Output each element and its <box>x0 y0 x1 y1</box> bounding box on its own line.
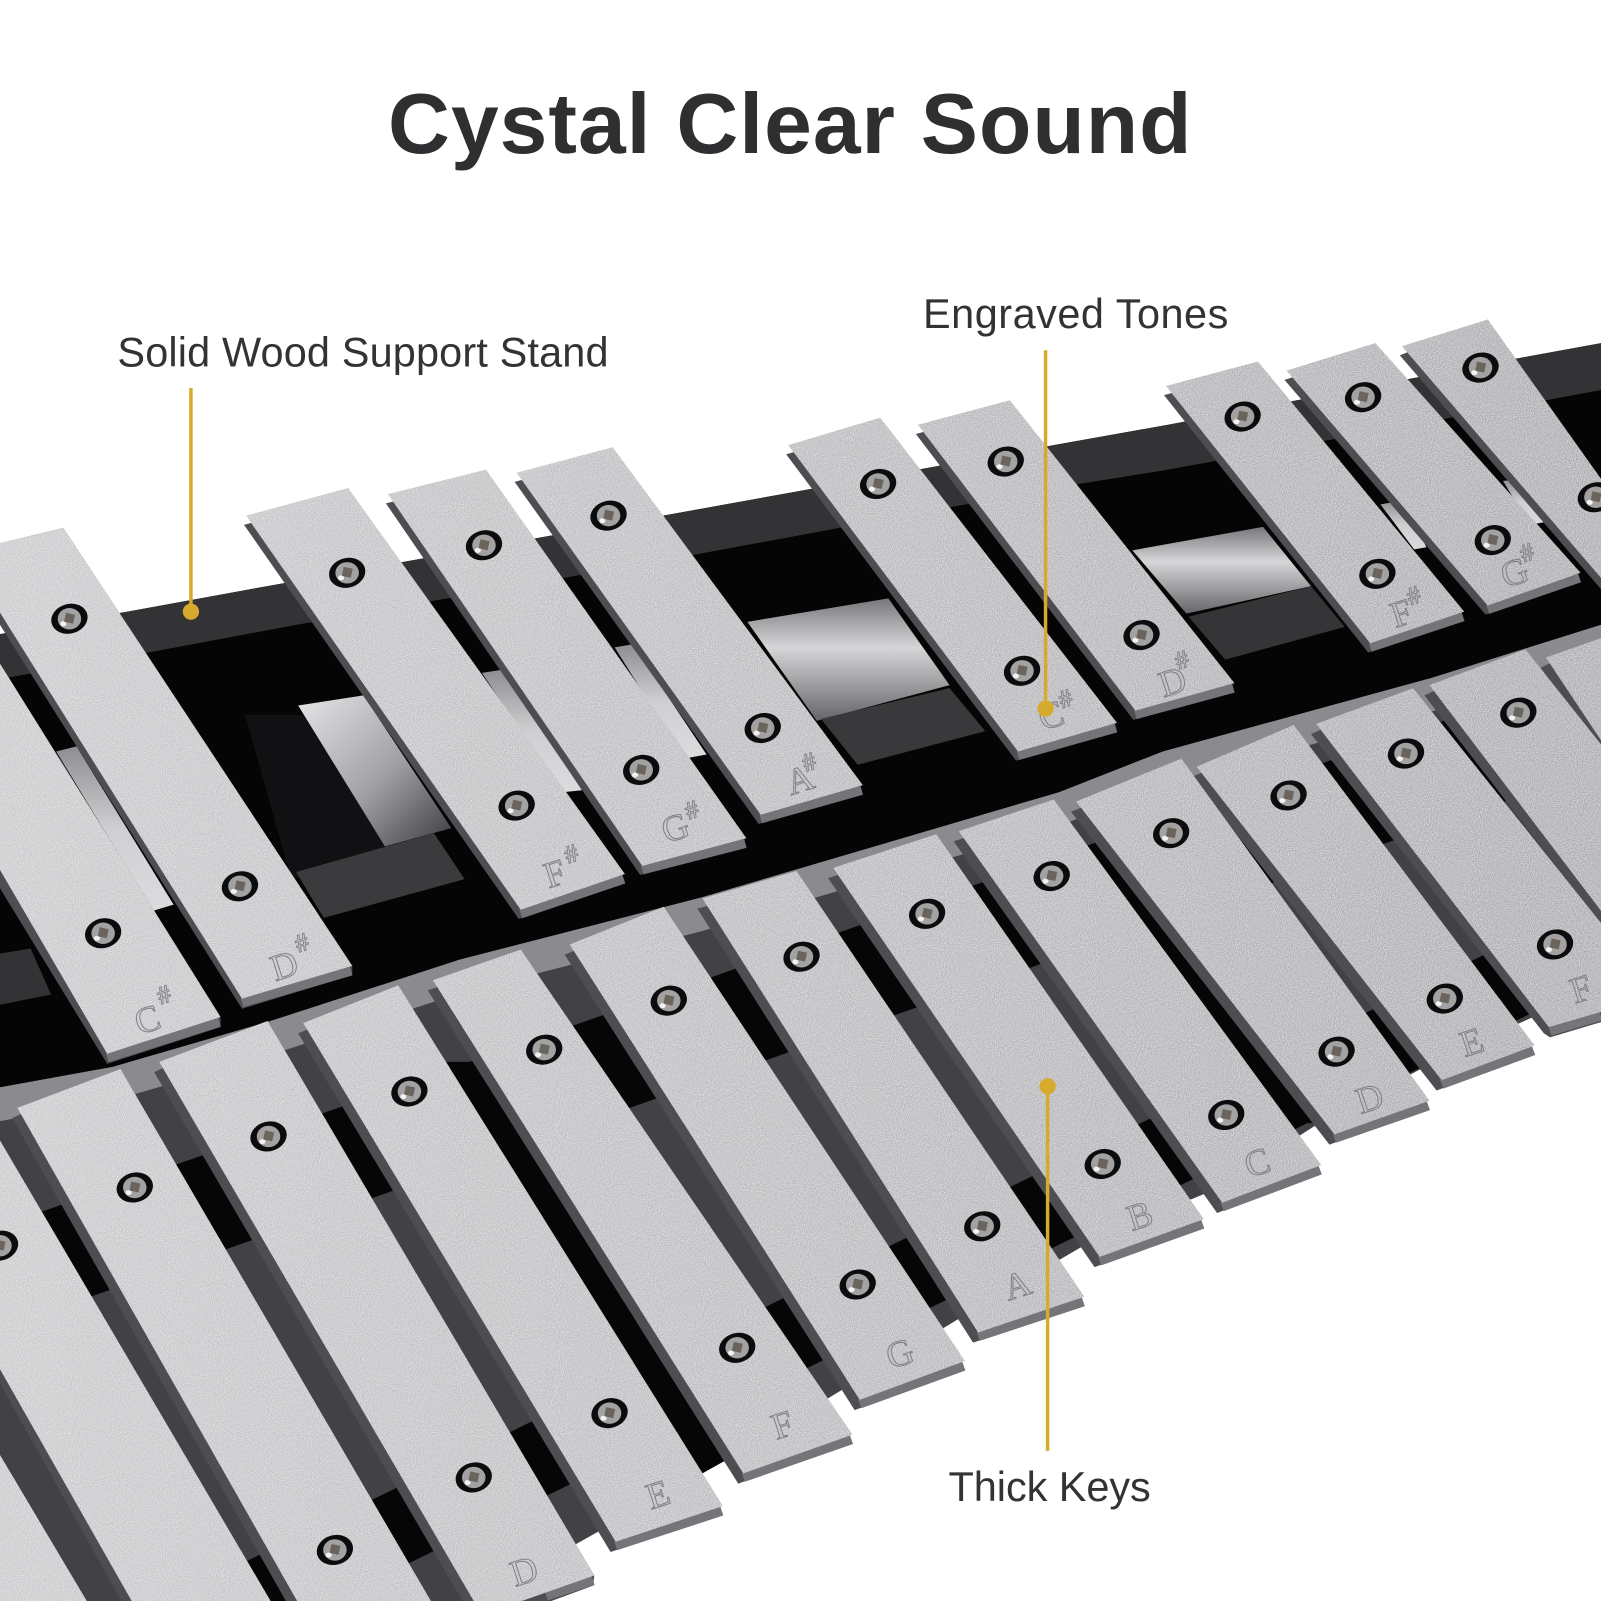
callout: Solid Wood Support Stand: Solid Wood Support Stand <box>117 329 609 376</box>
key: sharp C left: # <box>153 979 175 1010</box>
lower frame beneath natural keys <box>0 625 1601 1601</box>
key: natural F <box>428 950 853 1484</box>
key: sharp D left: D <box>265 942 303 989</box>
key: natural E right: E <box>1455 1019 1489 1065</box>
title: Cystal Clear Sound <box>388 76 1192 172</box>
key: sharp C centre: # <box>1055 683 1076 714</box>
key: natural B <box>828 834 1204 1267</box>
key: natural C left <box>12 1069 431 1601</box>
key: sharp A <box>515 447 863 824</box>
key: sharp G right: # <box>1516 537 1538 568</box>
key: sharp D centre: D <box>1153 658 1191 705</box>
key: sharp F: F <box>539 851 571 896</box>
key: sharp F right: F <box>1385 590 1417 636</box>
key: sharp G right <box>1284 343 1581 615</box>
key: sharp G: # <box>681 794 702 826</box>
key: sharp D left: # <box>291 927 312 958</box>
key: natural D <box>154 1021 594 1601</box>
callout: Solid Wood Support Stand <box>117 329 609 620</box>
key: natural A <box>697 871 1084 1343</box>
key: natural G <box>565 907 965 1410</box>
key: natural A: A <box>998 1261 1037 1308</box>
key: natural E right <box>1192 725 1535 1090</box>
key: sharp A right <box>1400 320 1601 589</box>
key: sharp G <box>386 470 746 875</box>
callout: Engraved Tones: Engraved Tones <box>923 290 1228 337</box>
key: sharp G: G <box>656 804 694 851</box>
key: natural B: B <box>1122 1192 1158 1239</box>
key: natural F right <box>1311 688 1601 1037</box>
key: natural far right <box>1541 638 1601 754</box>
key: sharp D left <box>0 528 352 1009</box>
key: sharp C centre: C <box>1033 692 1069 738</box>
key: natural B left <box>0 1141 271 1601</box>
key: natural F right: F <box>1565 966 1597 1011</box>
key: natural G: G <box>881 1330 919 1377</box>
key: sharp C left <box>0 664 221 1064</box>
key: natural D: D <box>505 1547 543 1594</box>
key: natural D right: D <box>1350 1074 1388 1122</box>
key: sharp C left: C <box>129 996 165 1043</box>
callout: Thick Keys <box>949 1078 1151 1510</box>
callout: Thick Keys: Thick Keys <box>949 1463 1151 1510</box>
key: sharp A: # <box>799 746 820 778</box>
key: natural D right <box>1071 759 1429 1145</box>
key: natural C <box>954 799 1321 1213</box>
key: sharp D centre: # <box>1171 644 1193 675</box>
key: sharp F right <box>1164 361 1464 652</box>
key: natural A left <box>0 1455 87 1601</box>
key: sharp F right: # <box>1403 580 1424 611</box>
key: sharp A: A <box>781 756 819 803</box>
key: natural E: E <box>641 1471 675 1517</box>
key: natural C: C <box>1239 1139 1275 1186</box>
callout: Engraved Tones <box>923 290 1228 717</box>
key: natural F: F <box>766 1402 798 1447</box>
key: natural E <box>298 985 723 1552</box>
key: sharp F <box>244 488 625 919</box>
key: sharp C centre <box>786 418 1117 761</box>
key: sharp G right: G <box>1495 549 1533 596</box>
wooden support frame <box>0 343 1601 1087</box>
key: sharp F: # <box>561 838 582 869</box>
key: natural G right <box>1424 649 1601 924</box>
key: sharp D centre <box>916 400 1234 720</box>
